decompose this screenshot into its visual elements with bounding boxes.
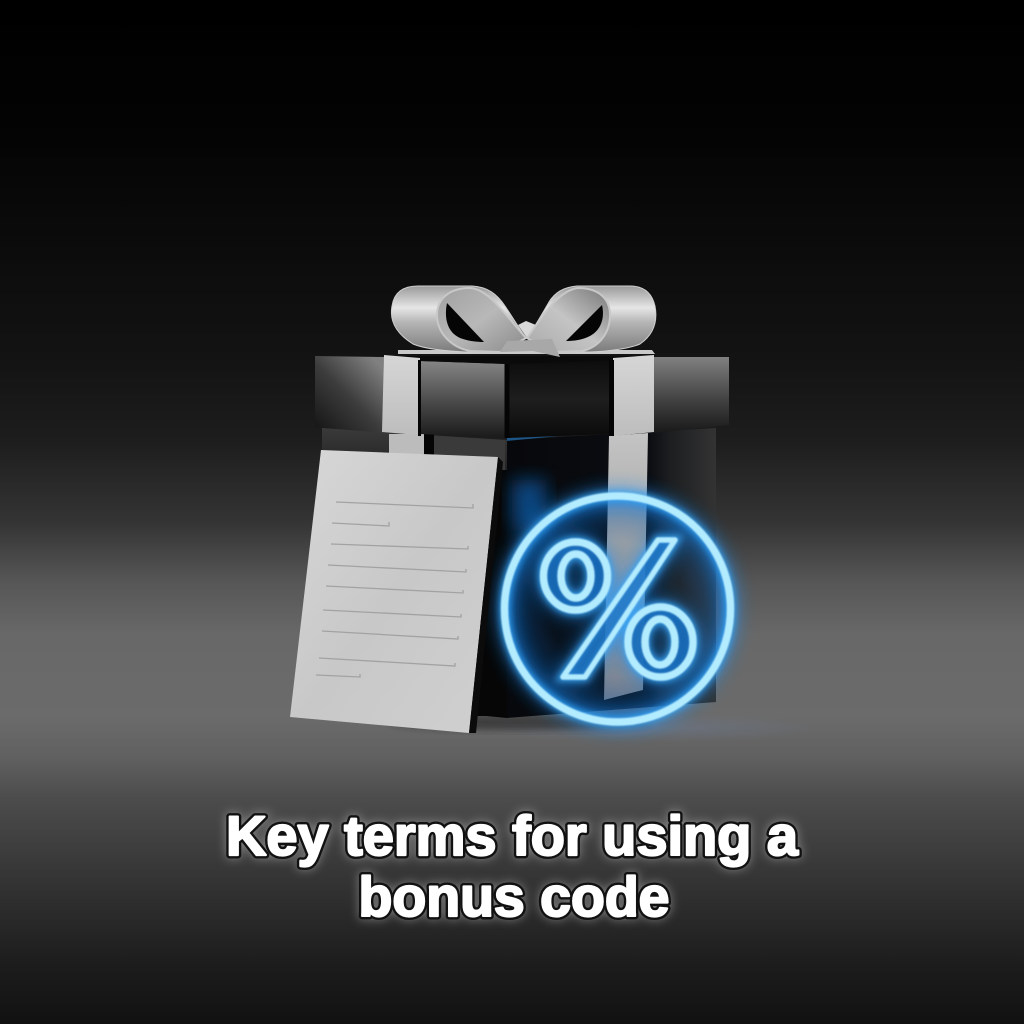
lid ribbons (382, 355, 654, 436)
right loop (527, 286, 656, 352)
gift box (315, 286, 729, 718)
bow (391, 286, 656, 357)
terms document (290, 450, 503, 733)
title outline (226, 804, 799, 928)
body ribbon (604, 433, 648, 700)
title text: bonus code (358, 865, 670, 928)
neon percent badge (504, 496, 730, 722)
title (226, 804, 799, 928)
floor shadow and glow (390, 714, 820, 742)
box body (322, 428, 716, 718)
slash fill (563, 540, 675, 677)
neon strokes (504, 496, 730, 722)
outer glow (504, 496, 730, 722)
left loop (391, 286, 526, 352)
title glow (226, 804, 799, 928)
badge blue tint (504, 496, 730, 722)
title outline: bonus code (358, 865, 670, 928)
knot (500, 339, 560, 357)
title outline: Key terms for using a (226, 804, 799, 867)
zero band fill (544, 542, 693, 677)
title text (226, 804, 799, 928)
left ribbon stub (389, 434, 424, 454)
document lines (316, 502, 473, 677)
lid (315, 356, 729, 438)
title text: Key terms for using a (226, 804, 799, 867)
inner glow (504, 496, 730, 722)
title glow: bonus code (358, 865, 670, 928)
title glow: Key terms for using a (226, 804, 799, 867)
